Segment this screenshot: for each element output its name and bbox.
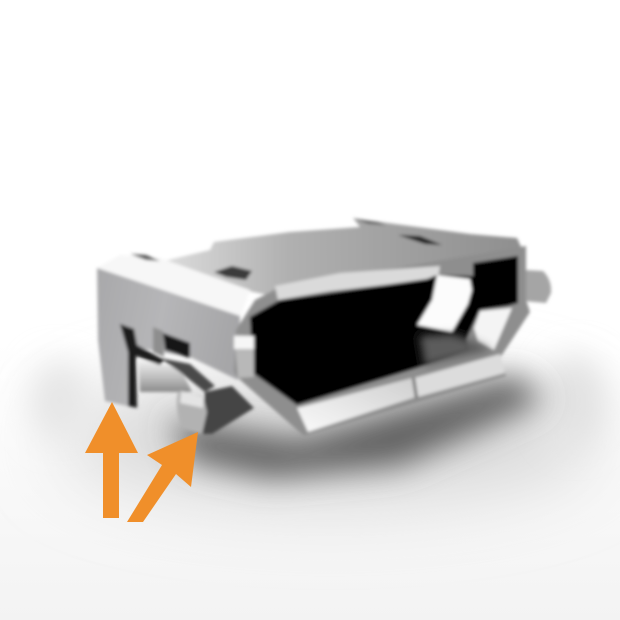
inner tongue: [420, 334, 492, 366]
solder foot: [177, 386, 254, 434]
top shell slots: [130, 219, 442, 280]
side cutouts: [120, 324, 215, 408]
upper bright rim: [275, 266, 440, 300]
right side tab: [524, 270, 551, 303]
arrow: vertical: [85, 402, 138, 518]
bottom lip: [297, 354, 505, 432]
white reflection right: [474, 308, 512, 350]
floor shadow: [30, 355, 605, 505]
opening (black cavity): [250, 256, 518, 405]
left side wall: [97, 268, 240, 408]
top shell: [97, 218, 526, 318]
connector body: [97, 218, 551, 436]
white reflection upper: [417, 275, 472, 332]
arrow: diagonal: [127, 432, 198, 522]
front side tab: [234, 335, 254, 378]
front frame: [234, 246, 530, 436]
